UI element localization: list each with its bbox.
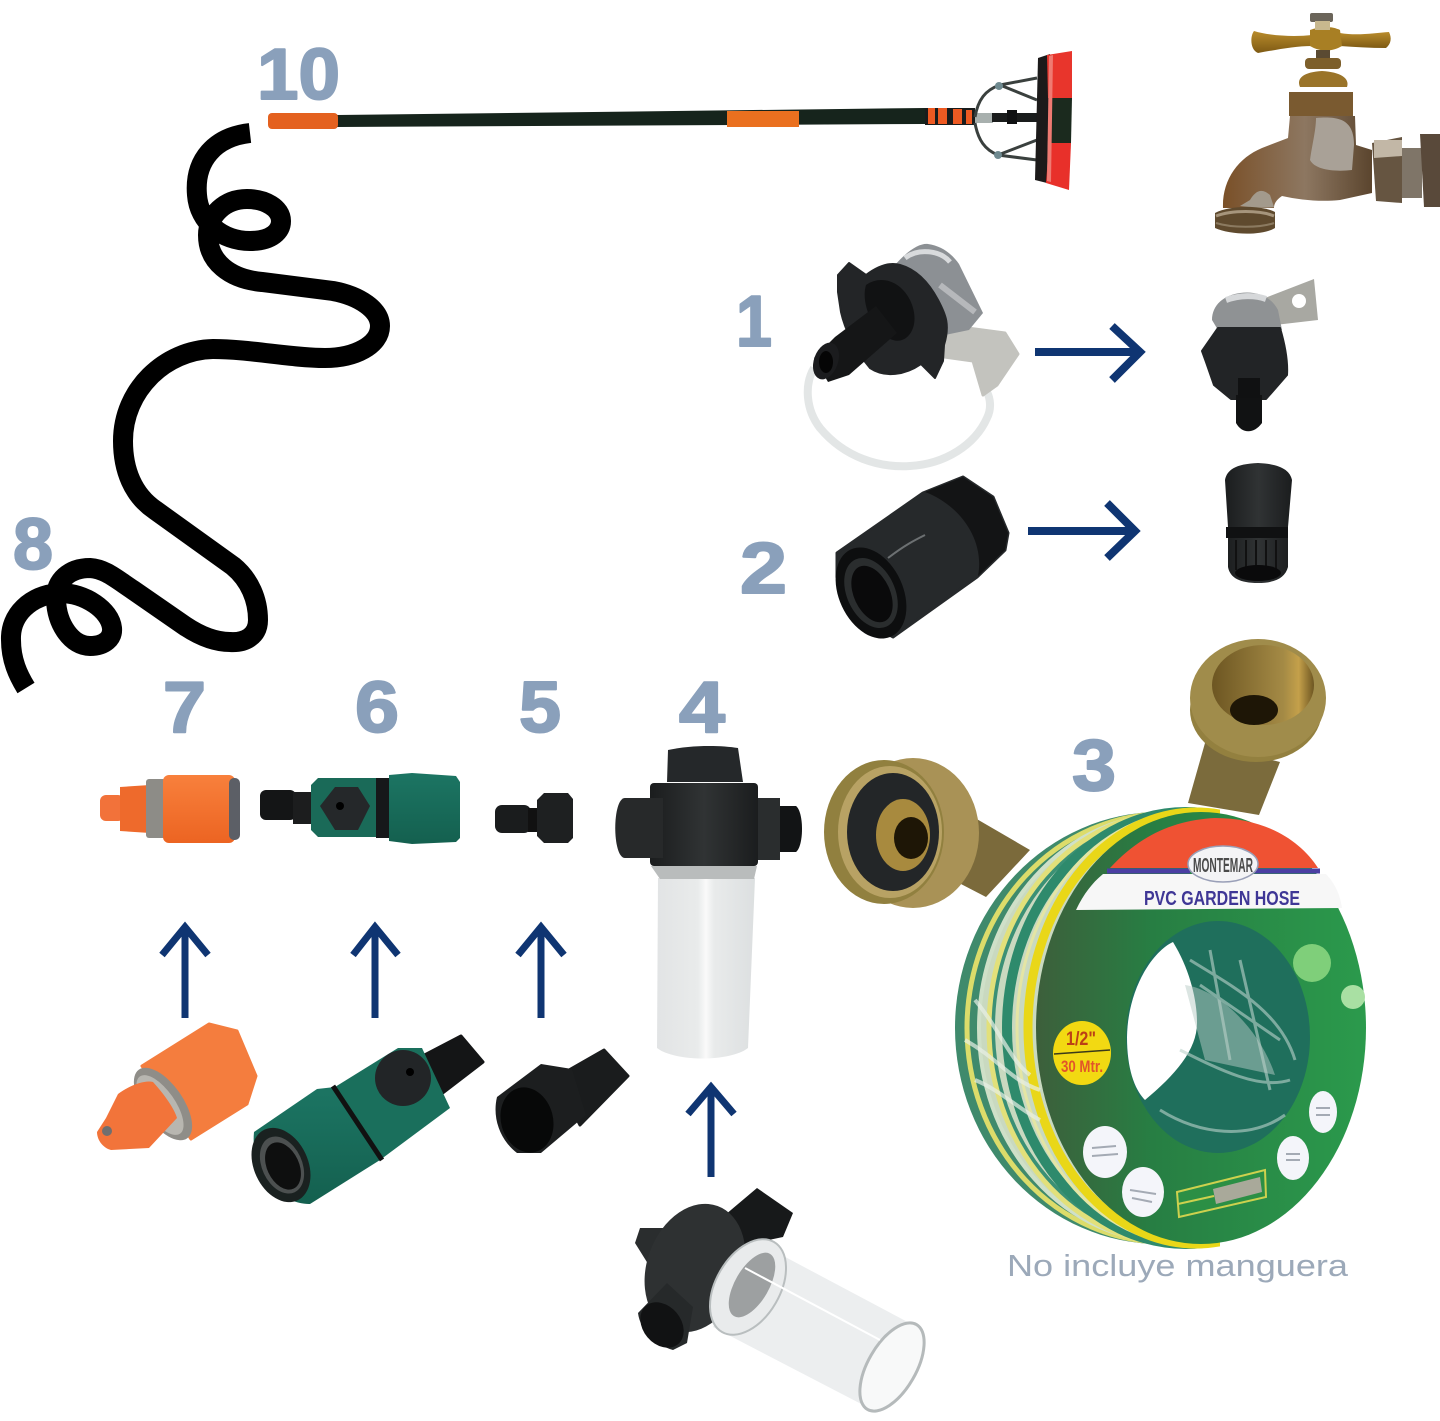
- size badge: [1053, 1021, 1111, 1085]
- part 7: orange connector angled: [97, 1024, 256, 1150]
- number 1: 1: [736, 282, 772, 362]
- number 7: 7: [163, 668, 206, 748]
- droplets: [1293, 944, 1365, 1009]
- hose reel with label: [955, 812, 1366, 1244]
- reel hole: [1126, 921, 1310, 1153]
- number 6: 6: [355, 668, 399, 748]
- arrow up 6: [353, 927, 398, 1018]
- number 8: 8: [13, 505, 53, 585]
- part 4: foam bottle upright: [615, 746, 802, 1058]
- part 6: green valve connector: [260, 773, 460, 844]
- part 5: black small connector: [495, 793, 573, 843]
- part 2: connector angled: [822, 477, 1008, 650]
- number 4: 4: [679, 668, 725, 748]
- brass fitting top: [1188, 639, 1326, 815]
- hose 8: [11, 133, 380, 688]
- brand oval: MONTEMAR: [1193, 855, 1253, 877]
- part 2: connector upright: [1225, 463, 1292, 583]
- arrow part 1: [1035, 326, 1140, 380]
- brand oval: [1188, 846, 1258, 882]
- part 6: green connector angled: [240, 1036, 483, 1212]
- part 1: tap adapter with strap: [808, 244, 1018, 466]
- note: hose not included: No incluye manguera: [1007, 1248, 1349, 1283]
- number 2: 2: [740, 529, 787, 609]
- number 3: 3: [1072, 726, 1116, 806]
- arrow up 7: [162, 927, 208, 1018]
- hose sample: [1177, 1170, 1266, 1217]
- product name: PVC GARDEN HOSE: [1144, 888, 1300, 910]
- size badge: 1/2": [1066, 1029, 1096, 1050]
- label: red top: [1110, 818, 1318, 868]
- number 5: 5: [519, 668, 561, 748]
- feature badges: [1083, 1091, 1337, 1217]
- faucet: [1215, 13, 1440, 234]
- arrow part 2: [1028, 503, 1135, 558]
- part 1: assembled adapter: [1202, 279, 1318, 431]
- telescopic brush pole 10: [268, 51, 1072, 190]
- brass fitting left: [824, 758, 1030, 908]
- arrow up 5: [518, 927, 564, 1018]
- part 4: foam bottle angled: [627, 1188, 937, 1421]
- part 5: black connector angled: [493, 1050, 628, 1159]
- size badge: 30 Mtr.: [1061, 1057, 1103, 1076]
- number 10: 10: [257, 35, 340, 115]
- arrow up 4: [688, 1087, 734, 1177]
- part 7: orange connector: [100, 775, 240, 843]
